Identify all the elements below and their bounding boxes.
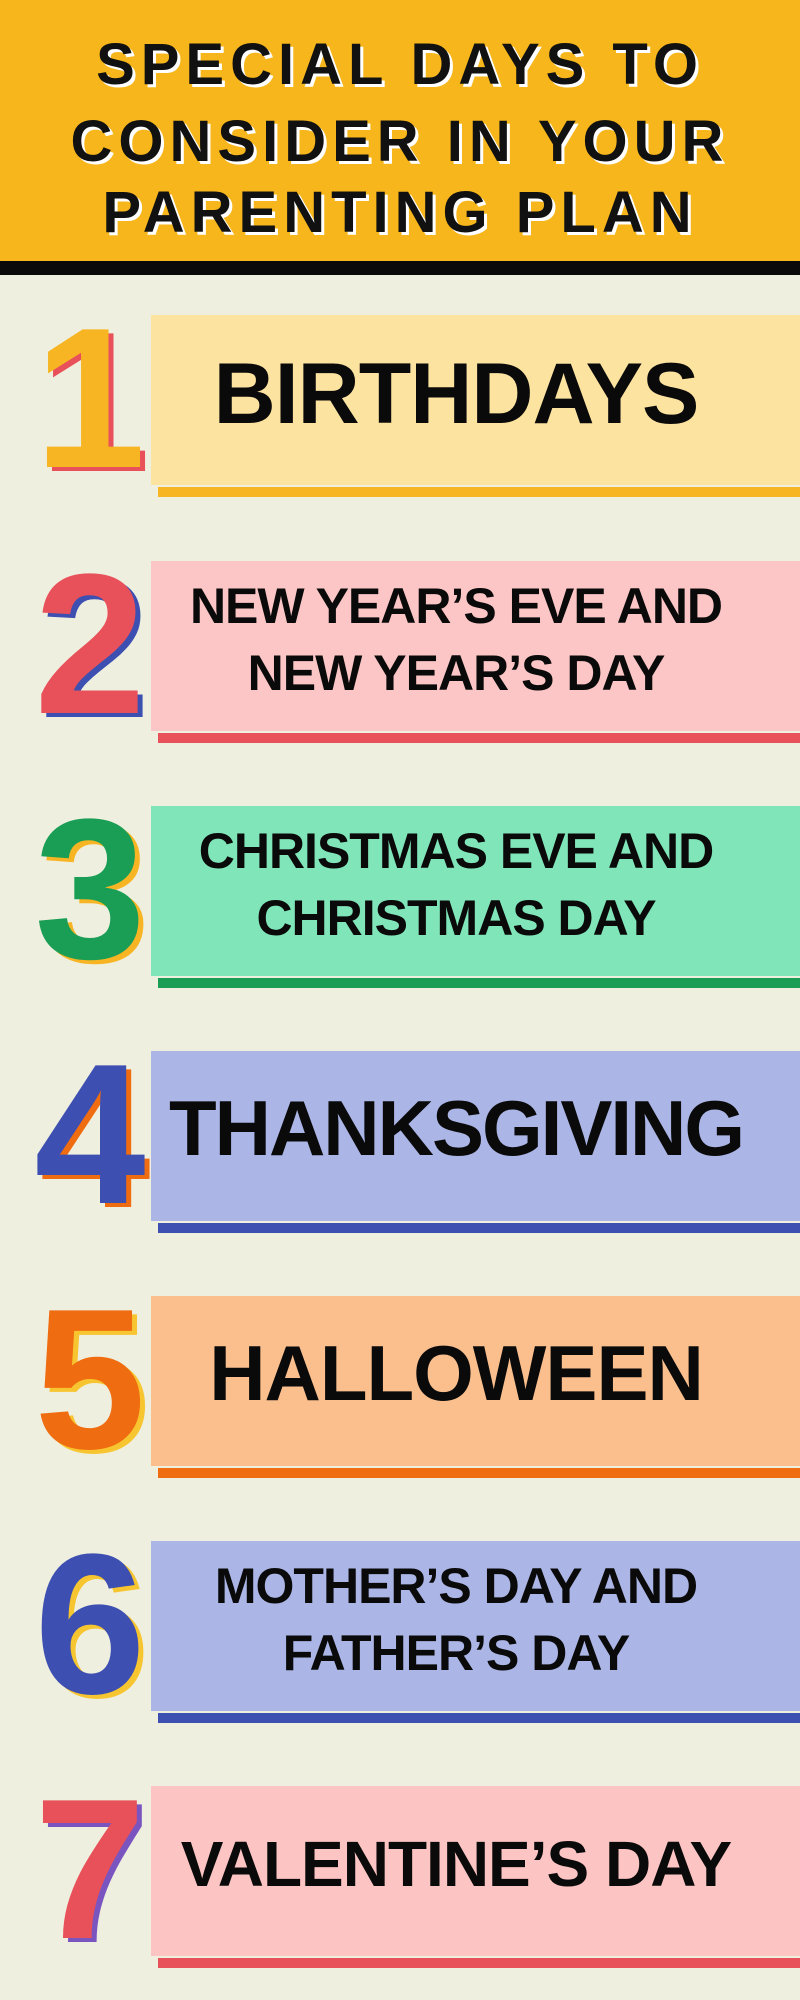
label: THANKSGIVING: [169, 1084, 743, 1172]
label: [199, 823, 713, 946]
label: MOTHER’S DAY AND: [215, 1558, 697, 1614]
label: HALLOWEEN: [209, 1329, 703, 1417]
label: BIRTHDAYS: [214, 346, 698, 442]
number 3: 3: [34, 778, 146, 1001]
item 7: valentine's day: [34, 1758, 800, 1981]
header: [0, 0, 800, 262]
label: FATHER’S DAY: [283, 1625, 629, 1681]
number 7: 7: [34, 1758, 146, 1981]
item 5: halloween: [34, 1268, 800, 1491]
label: VALENTINE’S DAY: [181, 1828, 731, 1900]
number 1: 1: [34, 287, 146, 510]
label: NEW YEAR’S EVE AND: [190, 578, 722, 634]
item 1: birthdays: [34, 287, 800, 510]
title: [71, 32, 729, 245]
title: SPECIAL DAYS TO: [96, 32, 704, 97]
label: CHRISTMAS DAY: [256, 890, 656, 946]
title: PARENTING PLAN: [102, 180, 698, 245]
number 4: 4: [34, 1023, 146, 1246]
number 5: 5: [34, 1268, 146, 1491]
number 2: 2: [34, 533, 146, 756]
item 2: new year: [34, 533, 800, 756]
label: [190, 578, 722, 701]
label: NEW YEAR’S DAY: [248, 645, 664, 701]
item 3: christmas: [34, 778, 800, 1001]
label: CHRISTMAS EVE AND: [199, 823, 713, 879]
item 4: thanksgiving: [34, 1023, 800, 1246]
label: [215, 1558, 697, 1681]
title: CONSIDER IN YOUR: [71, 109, 729, 174]
item 6: mother's and father's day: [34, 1513, 800, 1736]
number 6: 6: [34, 1513, 146, 1736]
